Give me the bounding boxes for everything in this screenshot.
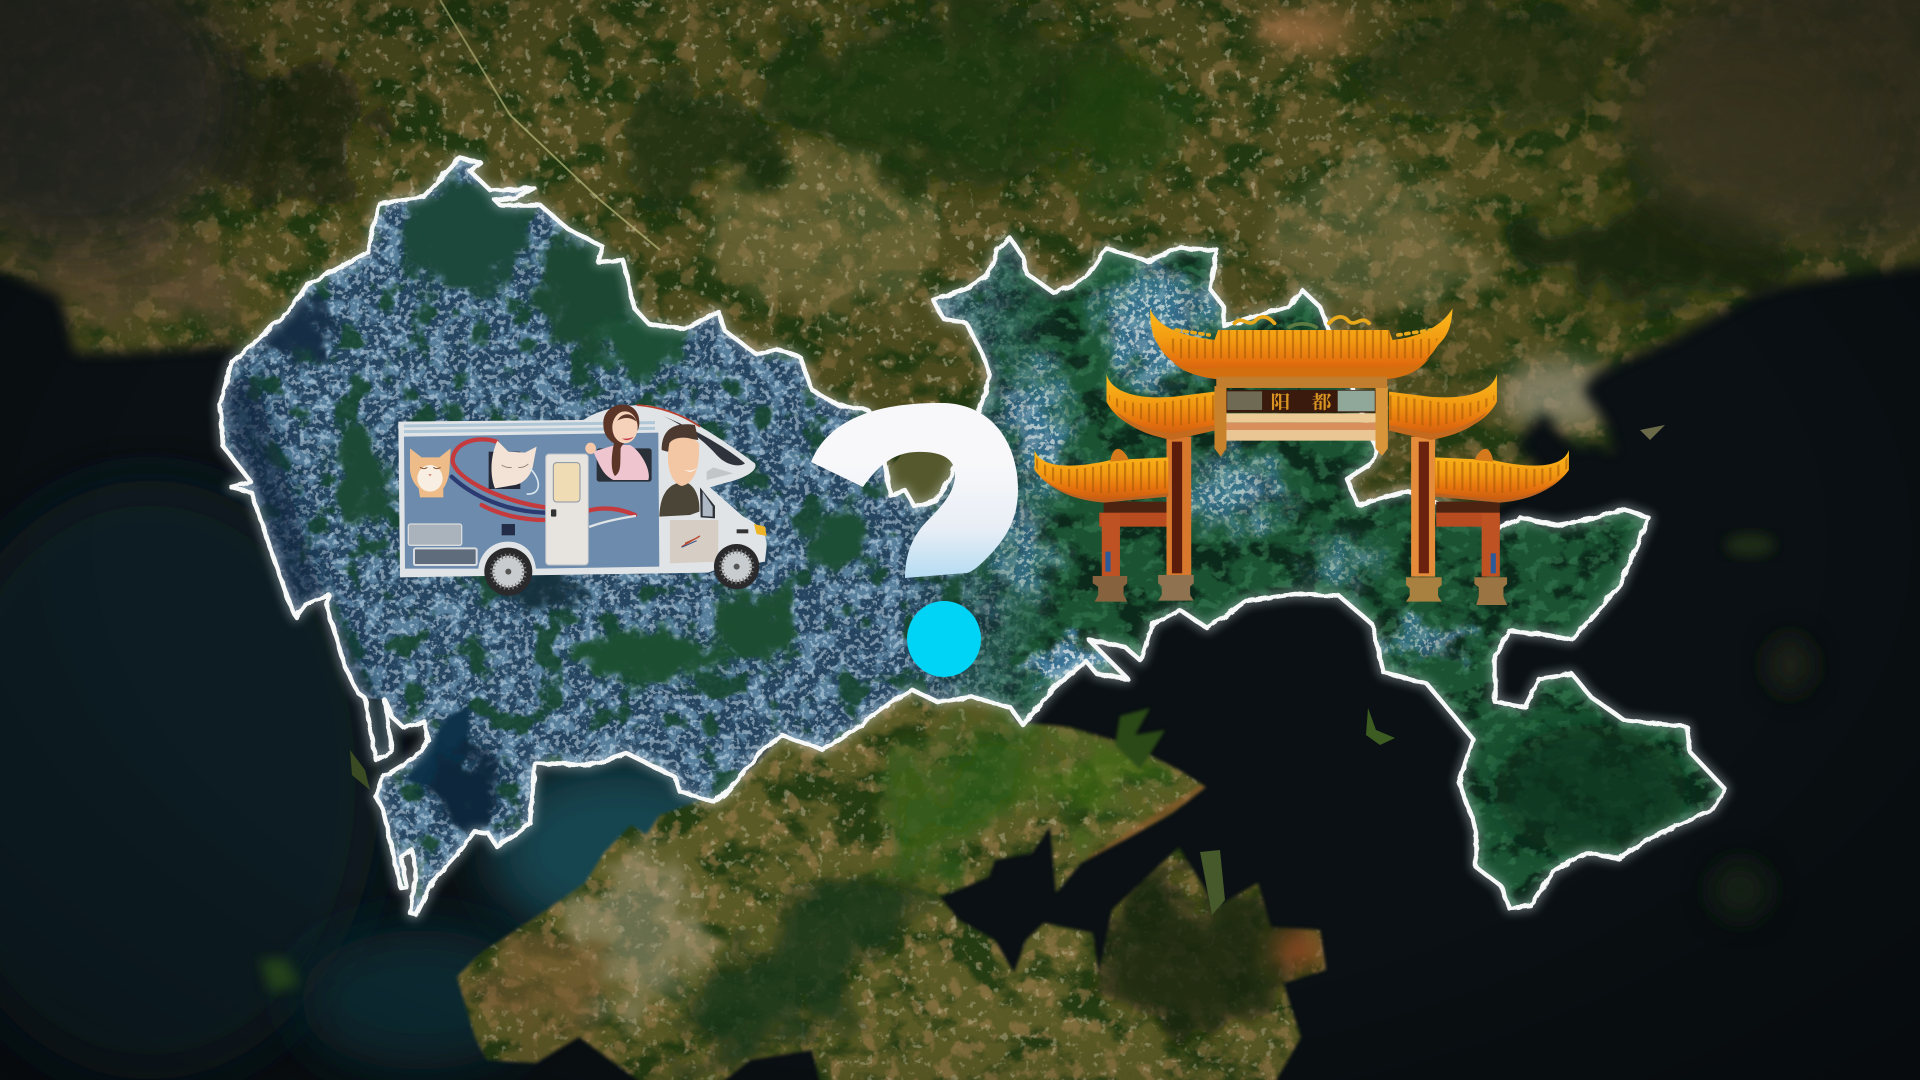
mountain ridges and urban valley [470, 687, 1295, 1080]
green mountains: central ridge [436, 510, 870, 830]
headlight [754, 524, 767, 536]
road: north highway [440, 0, 660, 250]
eastern district forest wash [909, 242, 1723, 906]
land: north mainland [0, 0, 1920, 507]
gate central beam and name board [1214, 386, 1388, 457]
wheel: front [714, 544, 759, 589]
cream cat in window [489, 441, 538, 494]
gate name characters: 阳 [1270, 392, 1290, 413]
gate middle left roof [1107, 374, 1214, 440]
gate upper roof [1150, 308, 1453, 388]
gate main left pillar [1158, 437, 1194, 601]
camper body [398, 405, 767, 577]
cab door with window [670, 520, 718, 563]
gate central beam and name board: 都 [1312, 392, 1332, 413]
far-east peninsula forest [1495, 725, 1685, 855]
western coast dark strip and bays [235, 380, 470, 790]
islands [260, 425, 1812, 992]
mountain shadows and town areas [0, 0, 1790, 320]
urban patches in eastern districts [980, 251, 1484, 696]
land: Hong Kong territories [456, 692, 1328, 1080]
gate left outer pillar and lintel [1093, 502, 1167, 602]
woman in window [585, 405, 652, 482]
roof stripes [404, 423, 655, 432]
windshield [663, 416, 745, 465]
gate main right pillar [1406, 437, 1442, 602]
orange cat [410, 448, 451, 497]
red and navy swooshes [452, 439, 635, 527]
man driving [659, 424, 699, 517]
icon: camper van with family and cats [398, 405, 767, 596]
green mountains: northern area [270, 175, 680, 530]
wheel: rear [484, 548, 532, 596]
land visible in the bowl of the question mark [889, 450, 955, 507]
sea: western dark teal water [0, 480, 750, 1080]
blue side panel [404, 433, 659, 569]
illustration: Chinese memorial gate [1035, 308, 1569, 605]
gate lower left roof [1035, 449, 1168, 503]
door window [553, 463, 580, 502]
utility hatch panels [408, 524, 462, 545]
question mark dot [907, 601, 981, 677]
Shenzhen outline with glow [220, 158, 1725, 915]
Shenzhen region satellite fill [221, 160, 1723, 912]
question mark stem and bowl [811, 403, 1018, 578]
gate lower right roof [1435, 449, 1569, 503]
gate right outer pillar and lintel [1436, 502, 1507, 605]
gate middle right roof [1389, 374, 1497, 440]
side door [546, 454, 588, 565]
gate roof dragons [1176, 317, 1431, 335]
